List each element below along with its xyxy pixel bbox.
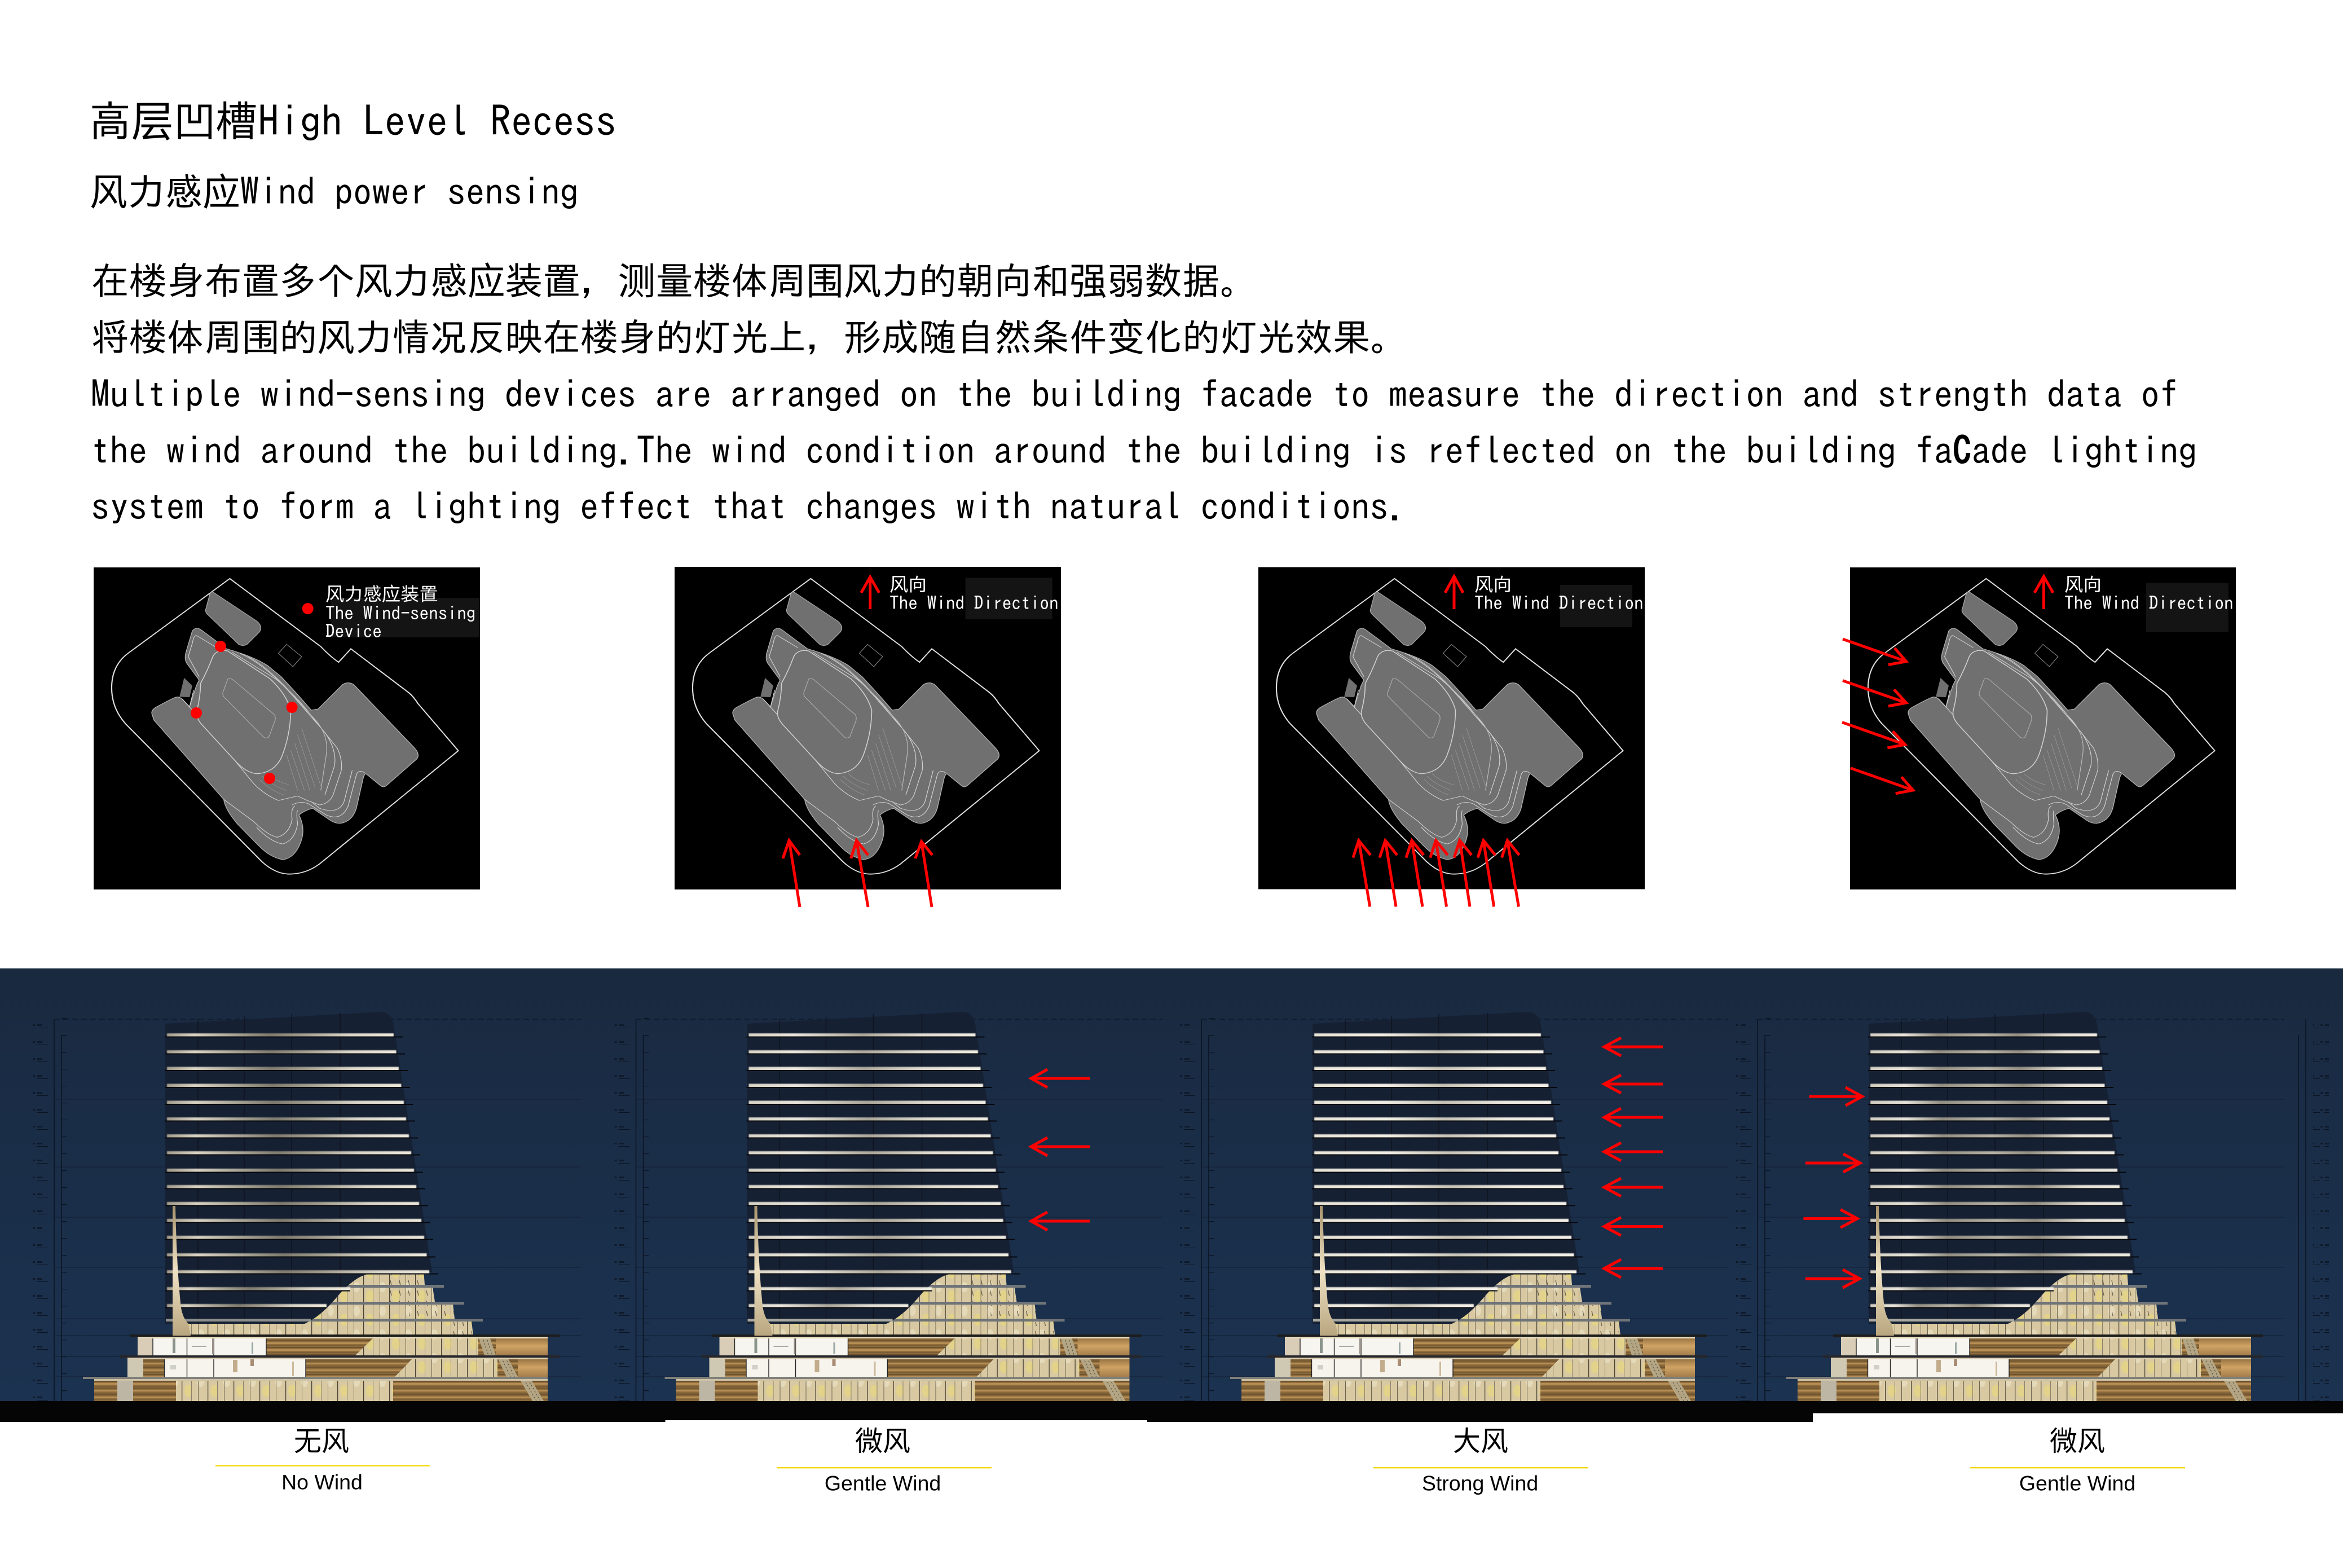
description text block: Multiple wind-sensing devices are arranged on the building facade to measure the direction and strength data of <box>91 375 2178 413</box>
panel: site plan with sensing devices: The Wind-sensing <box>325 604 475 622</box>
title: 高层凹槽High Level Recess <box>89 99 616 142</box>
description text block: system to form a lighting effect that changes with natural conditions. <box>91 487 1407 525</box>
panel: site plan with gentle wind from south <box>675 567 1061 907</box>
legend: wind direction: 风向 <box>889 575 927 593</box>
caption: no wind: No Wind <box>281 1470 363 1494</box>
wind arrows: gentle wind east elevation <box>1031 1069 1090 1230</box>
panel: site plan with gentle wind from west <box>1842 567 2236 889</box>
panel: site plan with sensing devices: Device <box>325 622 382 640</box>
description text block: 在楼身布置多个风力感应装置，测量楼体周围风力的朝向和强弱数据。 <box>91 262 1257 299</box>
caption: strong wind <box>1373 1419 1588 1495</box>
legend: sensing device: 风力感应装置 <box>325 584 438 603</box>
caption: gentle wind 1: 微风 <box>855 1419 910 1459</box>
panel: site plan with gentle wind from west: The Wind Direction <box>2064 593 2234 612</box>
ground strip <box>0 1401 2343 1422</box>
legend: wind direction: 风向 <box>1474 575 1512 593</box>
wind arrows <box>783 840 932 907</box>
caption: no wind <box>215 1419 430 1494</box>
wind arrows <box>1842 639 1913 794</box>
caption: gentle wind 1: Gentle Wind <box>825 1472 941 1495</box>
subtitle: 风力感应Wind power sensing <box>90 173 579 210</box>
elevation: gentle wind from west <box>1736 1011 2329 1401</box>
panel: site plan with strong wind from south: The Wind Direction <box>1474 593 1644 612</box>
wind arrows <box>1353 840 1520 907</box>
caption: gentle wind 2: 微风 <box>2050 1419 2105 1459</box>
caption: no wind: 无风 <box>294 1419 349 1459</box>
elevation: strong wind <box>1180 1011 1728 1401</box>
description text block: 将楼体周围的风力情况反映在楼身的灯光上，形成随自然条件变化的灯光效果。 <box>91 318 1408 356</box>
panel: site plan with sensing devices <box>94 567 480 889</box>
legend: wind direction: 风向 <box>2064 575 2102 593</box>
elevation: gentle wind from east <box>615 1011 1163 1401</box>
description text block <box>91 262 2197 525</box>
sensor dots <box>191 603 314 784</box>
panel: site plan with strong wind from south <box>1258 567 1645 907</box>
description text block: the wind around the building.The wind condition around the building is reflected on the building faCade lighting <box>91 431 2197 469</box>
caption: strong wind: 大风 <box>1453 1419 1508 1459</box>
elevation: no wind <box>33 1011 581 1401</box>
wind arrows: gentle wind west elevation <box>1804 1087 1862 1288</box>
caption: gentle wind 2: Gentle Wind <box>2019 1472 2135 1495</box>
caption: strong wind: Strong Wind <box>1422 1472 1538 1495</box>
night sky band <box>0 968 2343 1401</box>
caption: gentle wind 1 <box>777 1419 992 1495</box>
caption: gentle wind 2 <box>1970 1419 2185 1495</box>
wind arrows: strong wind elevation <box>1604 1038 1663 1278</box>
panel: site plan with gentle wind from south: The Wind Direction <box>889 593 1059 612</box>
